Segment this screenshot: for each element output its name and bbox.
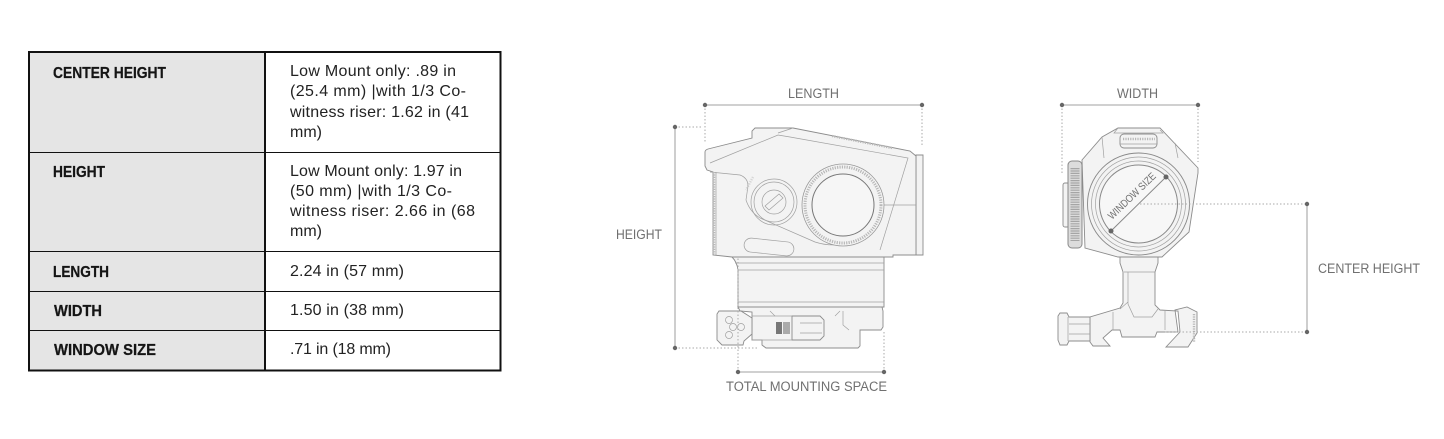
- dimension: center height: CENTER HEIGHT: [1318, 261, 1420, 276]
- row: window size: [54, 341, 391, 359]
- row: length: LENGTH: [53, 264, 109, 281]
- row: width: WIDTH: [54, 303, 102, 320]
- dimension: total mounting space: TOTAL MOUNTING SPACE: [726, 379, 887, 394]
- elevation turret: [1120, 134, 1157, 148]
- side view diagram: [616, 86, 924, 394]
- row: height: (50 mm) |with 1/3 Co-: [290, 183, 452, 200]
- row: width: [54, 302, 404, 320]
- dimension: total mounting space: [726, 258, 887, 394]
- row: window size: .71 in (18 mm): [290, 341, 391, 358]
- row: center height: (25.4 mm) |with 1/3 Co-: [290, 83, 466, 100]
- dimension: width: WIDTH: [1117, 86, 1158, 101]
- objective window: [802, 164, 884, 246]
- row: height: [53, 163, 475, 240]
- row: length: 2.24 in (57 mm): [290, 263, 404, 280]
- dimension: center height: [1140, 202, 1420, 334]
- row: height: mm): [290, 223, 322, 240]
- row: center height: Low Mount only: .89 in: [290, 63, 456, 80]
- side view sight body: [705, 128, 923, 257]
- dimension: width: [1060, 86, 1200, 175]
- dimension: length: LENGTH: [788, 86, 839, 101]
- window lens: [1088, 153, 1190, 255]
- front view sight body: [1058, 128, 1198, 347]
- windage dial: [751, 179, 797, 225]
- row: length: [53, 263, 404, 281]
- specification table: [29, 52, 501, 371]
- side knob: [1063, 161, 1082, 248]
- row: width: 1.50 in (38 mm): [290, 302, 404, 319]
- row: center height: CENTER HEIGHT: [53, 65, 166, 82]
- dimension: height: HEIGHT: [616, 227, 662, 242]
- dimension: window size: WINDOW SIZE: [1106, 170, 1159, 222]
- row: height: Low Mount only: 1.97 in: [290, 163, 462, 180]
- row: center height: [53, 63, 469, 141]
- dimension: height: [616, 125, 758, 350]
- battery slot: [743, 237, 795, 257]
- dimension: length: [703, 86, 924, 147]
- row: center height: witness riser: 1.62 in (41: [289, 104, 469, 121]
- label column background: [29, 52, 265, 370]
- side view mount: [717, 257, 884, 348]
- row: center height: mm): [290, 124, 322, 141]
- row: window size: WINDOW SIZE: [54, 342, 156, 359]
- front view diagram: [1058, 86, 1420, 347]
- row: height: HEIGHT: [53, 164, 105, 181]
- table grid: [29, 52, 501, 371]
- row: height: witness riser: 2.66 in (68: [289, 203, 475, 220]
